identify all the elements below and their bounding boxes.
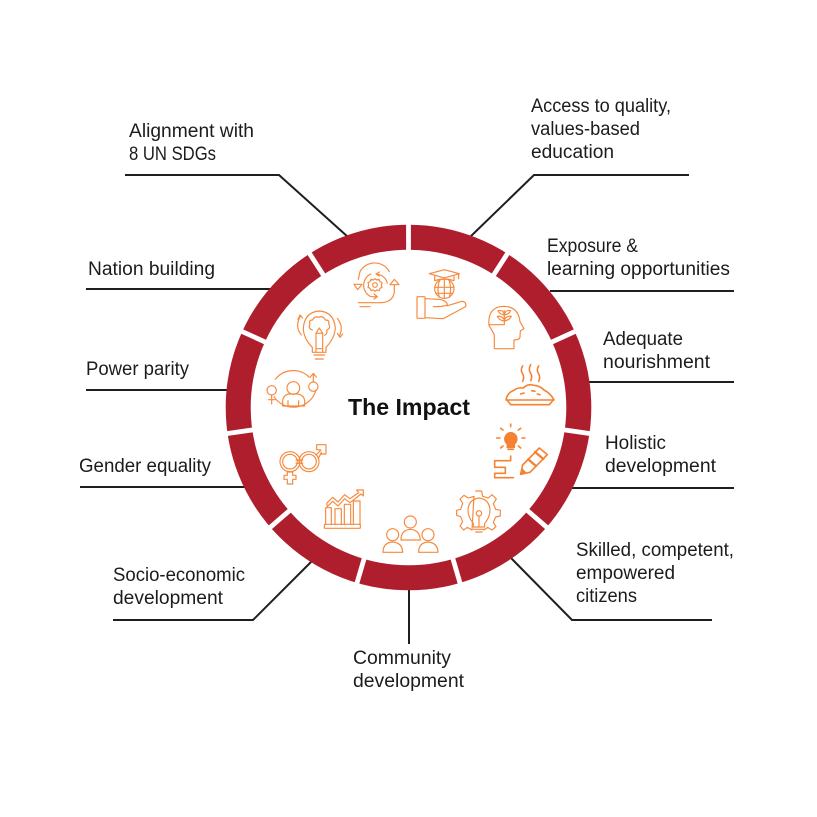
leader line: alignment with 8 UN SDGs — [125, 175, 348, 237]
label: socio-economic development — [113, 565, 245, 609]
leader line: nation building — [86, 288, 272, 290]
label: adequate nourishment: Adequate — [603, 329, 683, 350]
icon: hand with graduation cap and globe — [417, 270, 466, 319]
label: adequate nourishment: nourishment — [603, 352, 711, 373]
label: community development: development — [353, 671, 465, 692]
label: exposure and learning opportunities: learning opportunities — [547, 259, 730, 280]
title: The Impact — [348, 394, 470, 420]
label: skilled citizens: Skilled, competent, — [576, 540, 734, 561]
icon: cycle with gear — [354, 263, 399, 307]
label: gender equality: Gender equality — [79, 456, 211, 477]
icon: bar chart with rising arrow — [324, 490, 363, 528]
icon: steaming pie — [506, 365, 554, 405]
label: socio-economic development: development — [113, 588, 224, 609]
label: access to quality education: values-based — [531, 119, 640, 140]
icon: gear with lightbulb — [457, 491, 500, 532]
label: access to quality education: education — [531, 142, 614, 163]
label: holistic development: development — [605, 456, 717, 477]
label: skilled citizens: citizens — [576, 586, 637, 607]
icon: head with sprout — [489, 306, 524, 349]
label: adequate nourishment — [603, 329, 711, 373]
label: exposure and learning opportunities — [547, 236, 730, 280]
leader line: holistic development — [570, 487, 734, 489]
icon: gender equality symbols — [280, 445, 326, 484]
label: community development — [353, 648, 465, 692]
icon: person with power parity symbols — [267, 371, 318, 407]
icon: lightbulb with pencil — [495, 424, 547, 478]
leader line: access to quality education — [469, 175, 689, 238]
segmented red ring — [218, 215, 599, 592]
icon: three people — [383, 516, 438, 552]
label: power parity: Power parity — [86, 359, 189, 380]
leader line: adequate nourishment — [588, 381, 734, 383]
leader line: skilled citizens — [511, 558, 712, 620]
label: exposure and learning opportunities: Exposure & — [547, 236, 638, 257]
label: holistic development: Holistic — [605, 433, 666, 454]
leader line: exposure and learning opportunities — [550, 290, 734, 292]
label: skilled citizens — [576, 540, 734, 607]
label: alignment with 8 UN SDGs — [129, 121, 254, 165]
leader line: gender equality — [80, 486, 245, 488]
label: holistic development — [605, 433, 717, 477]
leader line: socio-economic development — [113, 560, 313, 620]
icon: lightbulb with gear and pencil — [298, 311, 343, 359]
leader line: community development — [408, 588, 410, 644]
label: access to quality education — [531, 96, 671, 163]
label: community development: Community — [353, 648, 452, 669]
label: nation building: Nation building — [88, 259, 215, 280]
label: alignment with 8 UN SDGs: 8 UN SDGs — [129, 144, 216, 165]
label: socio-economic development: Socio-economic — [113, 565, 245, 586]
label: access to quality education: Access to quality, — [531, 96, 671, 117]
label: skilled citizens: empowered — [576, 563, 675, 584]
leader line: power parity — [86, 389, 228, 391]
label: alignment with 8 UN SDGs: Alignment with — [129, 121, 254, 142]
